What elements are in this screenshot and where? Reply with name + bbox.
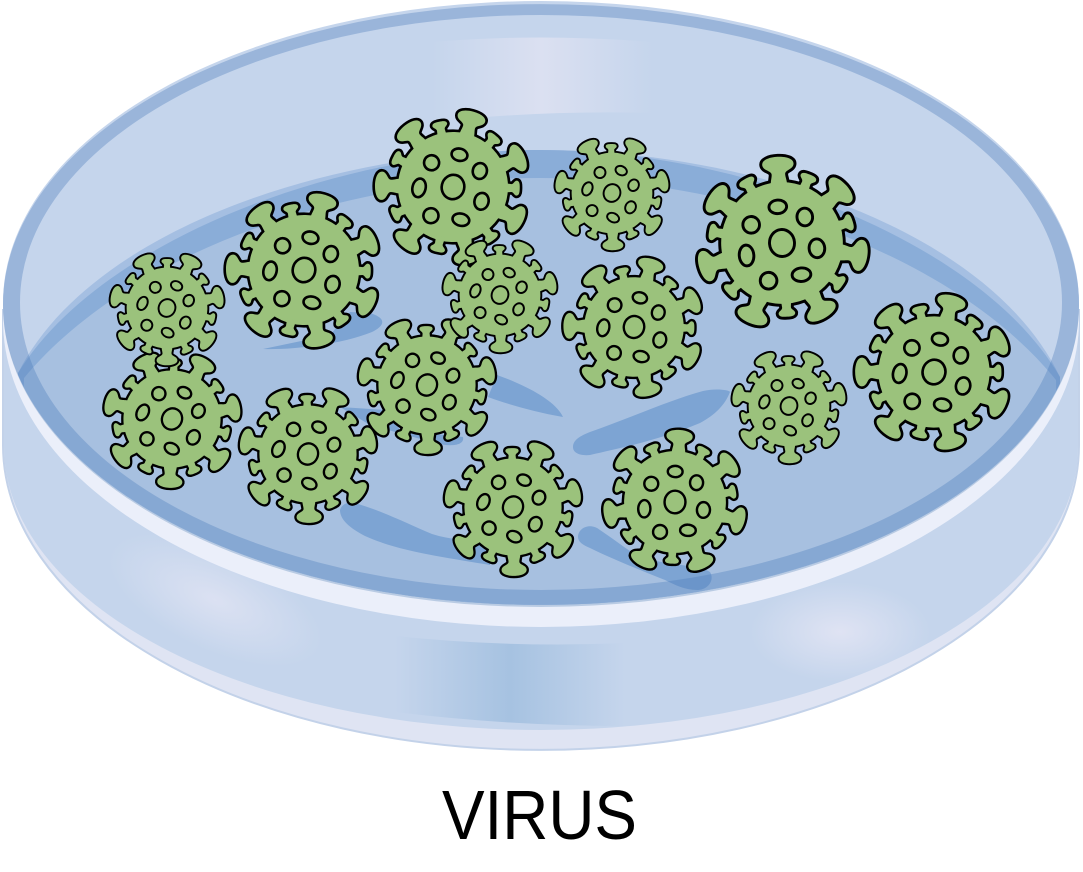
culture medium — [18, 150, 1060, 620]
rim shadow line — [3, 4, 1079, 607]
white rim band — [3, 13, 1079, 627]
dish base wall — [3, 310, 1079, 750]
dish lid — [3, 1, 1079, 605]
lid ring — [3, 4, 1079, 605]
label: VIRUS: VIRUS — [442, 776, 637, 854]
shadows under viruses — [263, 312, 730, 590]
viruses — [79, 93, 1029, 597]
wall highlights — [90, 506, 930, 726]
lid highlight — [432, 38, 652, 122]
